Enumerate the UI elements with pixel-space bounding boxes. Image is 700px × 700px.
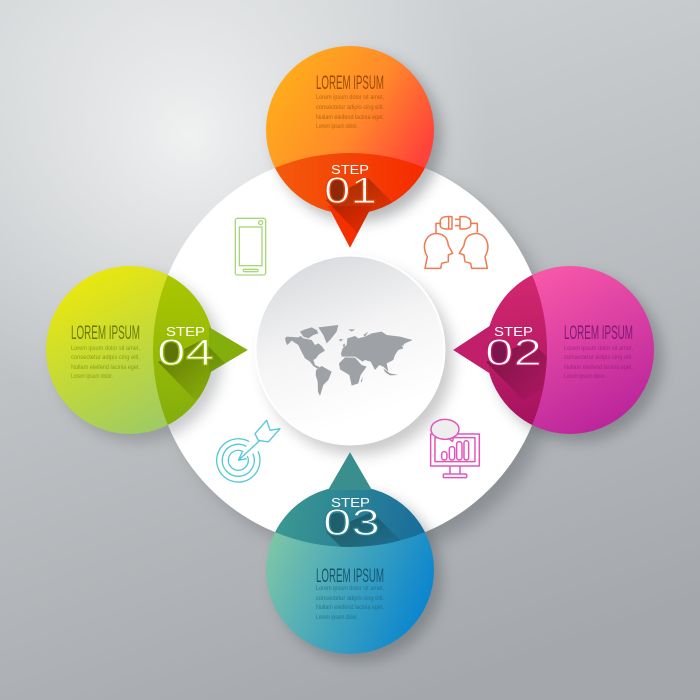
step label: STEP <box>331 496 370 510</box>
heading: LOREM IPSUM <box>316 566 384 587</box>
icon: two heads connected by a plug <box>424 217 488 268</box>
center disc with world map <box>256 256 453 455</box>
body text: Lorem ipsum dolor sit amet, <box>71 345 140 352</box>
dark zone and pointer <box>275 153 425 248</box>
world map <box>285 325 413 396</box>
heading: LOREM IPSUM <box>71 323 140 344</box>
body text: Nullam eleifend lacinia eget. <box>316 114 384 121</box>
body text <box>316 94 384 130</box>
heading: LOREM IPSUM <box>564 323 633 344</box>
body text: Nullam eleifend lacinia eget. <box>71 364 140 371</box>
step number: 01 <box>324 170 377 211</box>
icon: monitor with chart and speech bubble <box>431 419 479 478</box>
step number: 02 <box>485 332 542 373</box>
body text <box>316 585 384 621</box>
dark zone and pointer <box>153 275 248 425</box>
body text: Nullam eleifend lacinia eget. <box>316 604 384 611</box>
body text: consectetur adipis cing elit. <box>316 595 384 602</box>
body text <box>564 345 633 380</box>
body text <box>71 345 140 380</box>
step number: 04 <box>157 332 214 373</box>
step number: 03 <box>323 502 380 543</box>
step label: STEP <box>331 163 369 177</box>
body text: Lorem ipsum dolor sit amet, <box>316 94 384 101</box>
heading: LOREM IPSUM <box>316 73 384 94</box>
panel: step 02 <box>453 266 662 442</box>
body text: consectetur adipis cing elit. <box>71 354 140 361</box>
panel: step 03 <box>266 452 442 662</box>
large white disc <box>153 153 557 557</box>
body text: Lorem ipsum dolor. <box>71 373 113 380</box>
panel: step 04 <box>46 266 248 442</box>
body text: Nullam eleifend lacinia eget. <box>564 364 633 371</box>
dark zone and pointer <box>453 275 547 425</box>
body text: consectetur adipis cing elit. <box>564 354 633 361</box>
icon: target with arrow <box>217 420 280 482</box>
body text: Lorem ipsum dolor. <box>316 614 358 621</box>
body text: Lorem ipsum dolor sit amet, <box>316 585 384 592</box>
icon: smartphone <box>235 218 266 275</box>
body text: Lorem ipsum dolor. <box>316 123 358 130</box>
body text: Lorem ipsum dolor. <box>564 373 606 380</box>
dark zone and pointer <box>275 452 425 547</box>
step label: STEP <box>494 325 533 339</box>
step label: STEP <box>166 325 205 339</box>
body text: consectetur adipis cing elit. <box>316 104 384 111</box>
panel: step 01 <box>266 46 442 248</box>
body text: Lorem ipsum dolor sit amet, <box>564 345 633 352</box>
